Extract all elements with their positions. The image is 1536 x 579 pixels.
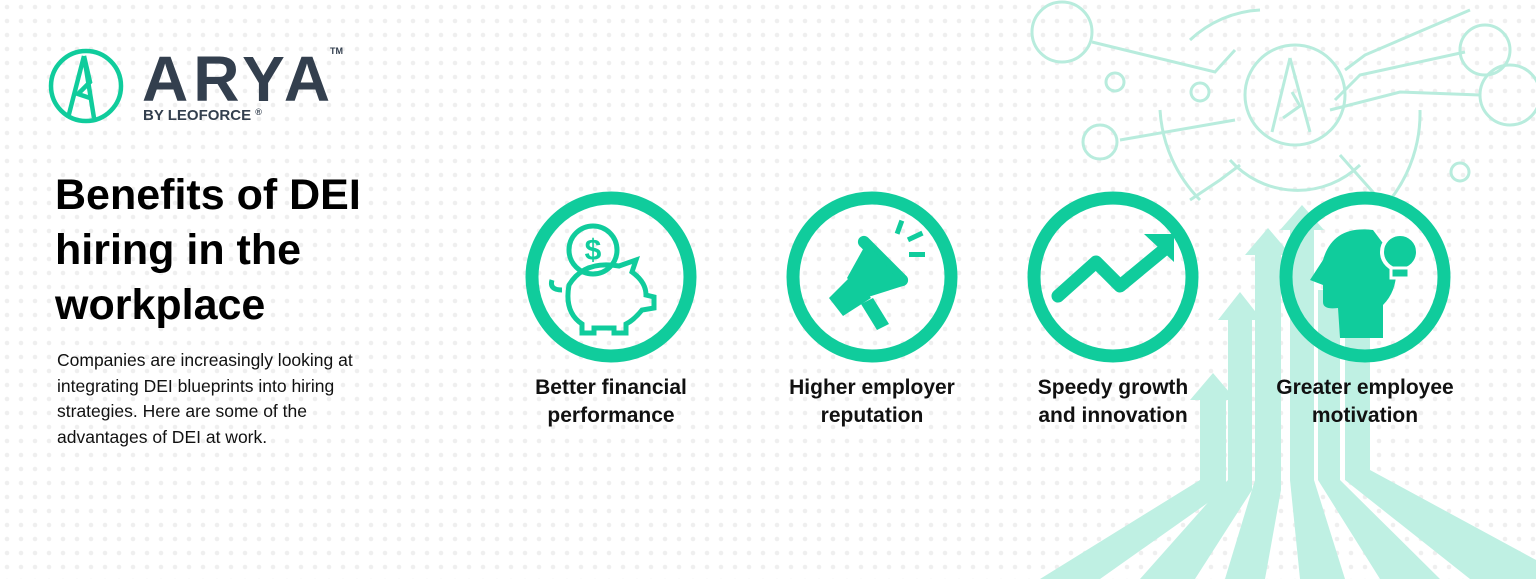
label 2 (789, 376, 955, 427)
label 3: Speedy growth (1038, 376, 1188, 399)
logo: ARYA (142, 43, 335, 115)
body text: Companies are increasingly looking at integrating DEI blueprints into hiring strategies. Here are some of the advantages of DEI at work. (57, 350, 353, 446)
label 1 (535, 376, 687, 427)
label 1: performance (547, 404, 675, 427)
icon: piggy bank (526, 192, 696, 362)
icon: head with bulb (1280, 192, 1450, 362)
icon: piggy bank: $ (585, 234, 602, 267)
icon: megaphone (786, 192, 958, 362)
logo: TM (330, 46, 343, 56)
title (54, 171, 361, 329)
label 2: reputation (821, 404, 923, 427)
icon: growth arrow (1028, 192, 1198, 362)
title: Benefits of DEI (55, 171, 361, 219)
title: hiring in the (55, 226, 301, 274)
logo: BY LEOFORCE ® (143, 107, 262, 124)
label 3: and innovation (1038, 404, 1188, 427)
label 3 (1038, 376, 1188, 427)
label 4 (1276, 376, 1454, 427)
label 2: Higher employer (789, 376, 955, 399)
logo (48, 43, 343, 124)
label 4: motivation (1312, 404, 1418, 427)
label 4: Greater employee (1276, 376, 1454, 399)
label 1: Better financial (535, 376, 687, 399)
title: workplace (55, 281, 265, 329)
